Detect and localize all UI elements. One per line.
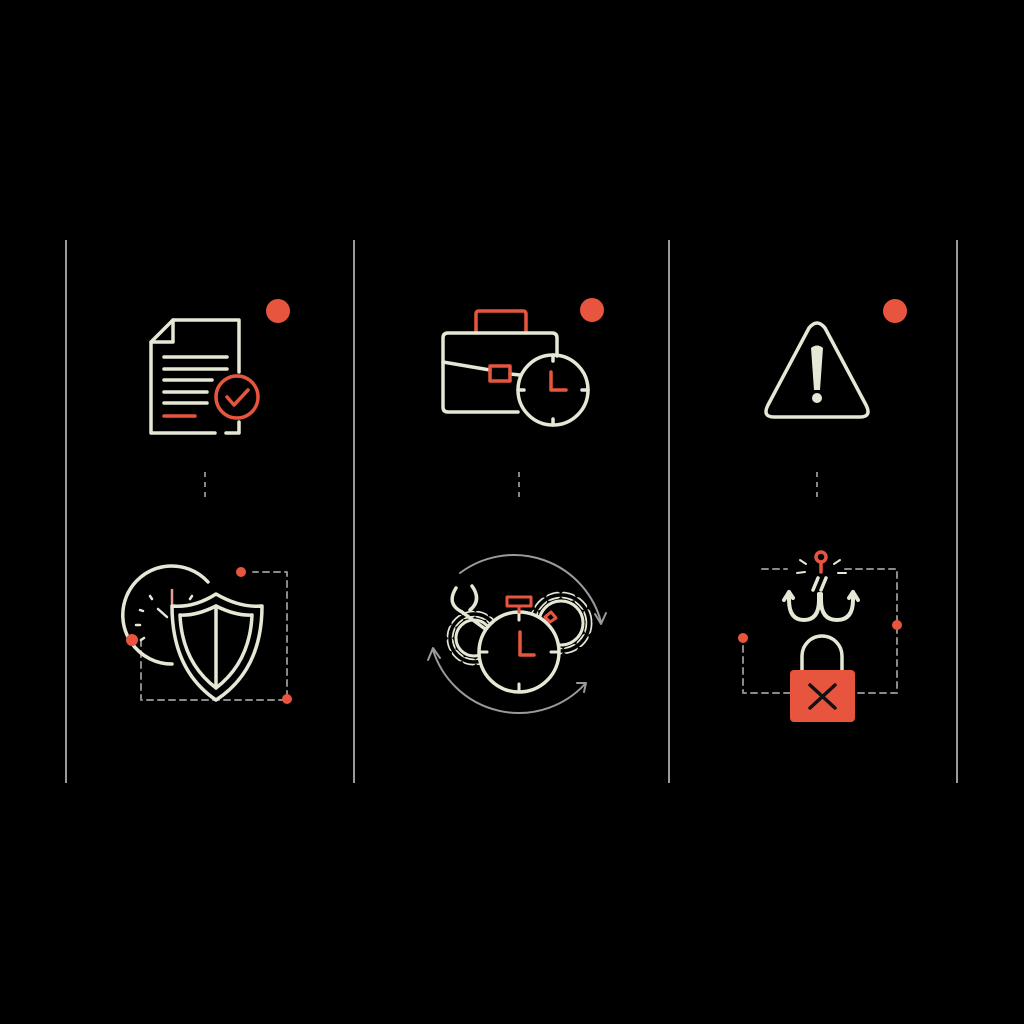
connector dashed 1 [204,472,206,498]
connector dashed 2 [518,472,520,498]
panel: column 3 [738,299,907,722]
icon: clock with shield [123,566,292,704]
icon: briefcase with clock [443,311,588,425]
marker dot 1 [266,299,290,323]
icon: stopwatch with gears and cycle arrows [428,555,606,713]
marker dot 3 [883,299,907,323]
panel: column 2 [428,298,606,713]
panel: column 1 [123,299,292,704]
icon: phishing hook and locked padlock [738,552,902,722]
connector dashed 3 [816,472,818,498]
icon: warning triangle [766,323,868,417]
icon: document with check [151,320,258,433]
marker dot 2 [580,298,604,322]
